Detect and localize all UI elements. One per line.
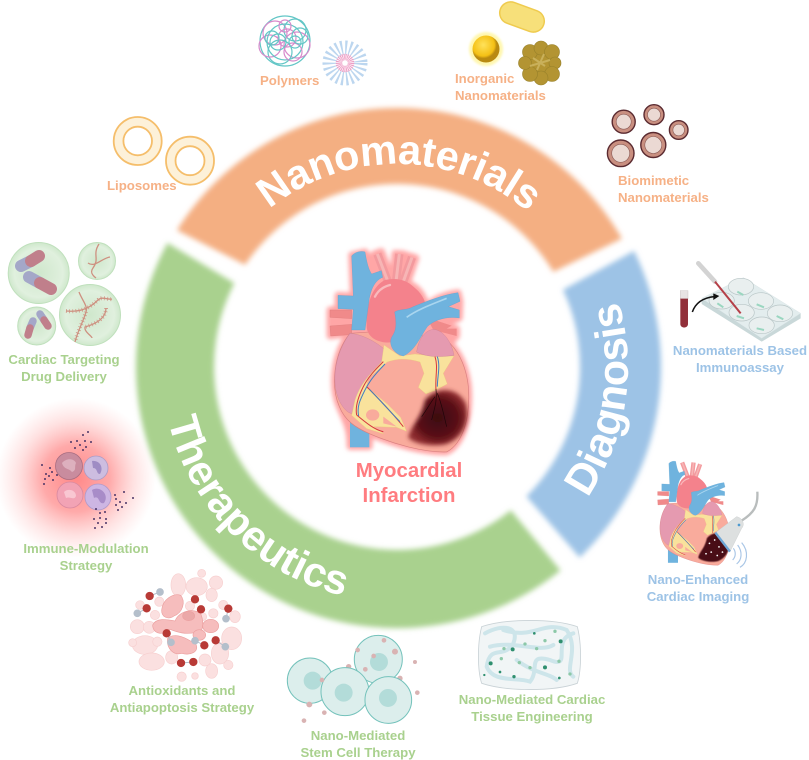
icon: inorganic nanomaterials <box>469 0 561 85</box>
icon: polymers <box>259 16 310 66</box>
label: Nano-Mediated Cardiac Tissue Engineering: Tissue Engineering <box>471 709 593 724</box>
segment: Nanomaterials: Nanomaterials <box>255 139 538 208</box>
label: Inorganic Nanomaterials: Nanomaterials <box>455 88 546 103</box>
label: Antioxidants and Antiapoptosis Strategy: Antiapoptosis Strategy <box>110 700 255 715</box>
label: Nano-Mediated Cardiac Tissue Engineering: Nano-Mediated Cardiac <box>459 692 605 707</box>
icon: immunoassay plate, blood tube and pipette <box>680 263 801 342</box>
label: Biomimetic Nanomaterials <box>618 173 709 205</box>
label: Inorganic Nanomaterials: Inorganic <box>455 71 514 86</box>
icon: micelle <box>330 48 360 78</box>
icon: tissue engineering scaffold <box>478 620 581 690</box>
label: Immune-Modulation Strategy: Strategy <box>60 558 113 573</box>
label: Nano-Enhanced Cardiac Imaging: Nano-Enhanced <box>648 572 748 587</box>
icon: liposomes <box>114 117 214 185</box>
segment: Nanomaterials <box>174 104 624 274</box>
gold sphere <box>469 32 503 66</box>
label: Immune-Modulation Strategy <box>23 541 149 573</box>
heart glow <box>330 251 469 452</box>
gold nanoflower <box>518 41 561 85</box>
capsule <box>497 0 547 35</box>
segment: Diagnosis <box>524 248 664 560</box>
label: Nano-Mediated Cardiac Tissue Engineering <box>459 692 605 724</box>
label: Nanomaterials Based Immunoassay <box>673 343 807 375</box>
label: Antioxidants and Antiapoptosis Strategy <box>110 683 255 715</box>
pipette <box>698 263 715 282</box>
blood tube <box>680 291 688 299</box>
small heart <box>658 461 730 565</box>
label: Biomimetic Nanomaterials: Biomimetic <box>618 173 689 188</box>
label: Nanomaterials Based Immunoassay: Immunoassay <box>696 360 785 375</box>
title: Myocardial Infarction: Infarction <box>363 485 455 507</box>
title: Myocardial Infarction: Myocardial <box>356 460 462 482</box>
icon: antioxidants cluster <box>129 569 242 681</box>
label: Nano-Mediated Stem Cell Therapy: Stem Cell Therapy <box>300 745 416 760</box>
label: Polymers: Polymers <box>260 73 319 88</box>
ultrasound probe <box>715 492 757 567</box>
label: Nano-Mediated Stem Cell Therapy: Nano-Mediated <box>311 728 405 743</box>
icon: stem cells <box>287 635 420 723</box>
drug capsules <box>21 256 51 335</box>
label: Cardiac Targeting Drug Delivery: Cardiac Targeting <box>8 352 120 367</box>
icon: nano-enhanced cardiac imaging <box>658 461 757 567</box>
segment: Therapeutics <box>132 240 562 632</box>
segment: Therapeutics: Therapeutics <box>170 412 346 594</box>
label: Nano-Enhanced Cardiac Imaging <box>647 572 749 604</box>
segment: Diagnosis: Diagnosis <box>564 304 630 496</box>
label: Cardiac Targeting Drug Delivery: Drug Delivery <box>21 369 108 384</box>
icon: biomimetic nanomaterials <box>607 105 688 167</box>
icon: immune modulation cells <box>41 431 134 529</box>
label: Nano-Mediated Stem Cell Therapy <box>300 728 416 760</box>
infarct area <box>408 390 467 445</box>
label: Antioxidants and Antiapoptosis Strategy: Antioxidants and <box>129 683 235 698</box>
label: Biomimetic Nanomaterials: Nanomaterials <box>618 190 709 205</box>
label: Nanomaterials Based Immunoassay: Nanomaterials Based <box>673 343 807 358</box>
title: Myocardial Infarction <box>356 460 462 507</box>
label: Nano-Enhanced Cardiac Imaging: Cardiac Imaging <box>647 589 749 604</box>
label: Liposomes: Liposomes <box>107 178 177 193</box>
label: Inorganic Nanomaterials <box>455 71 546 103</box>
label: Cardiac Targeting Drug Delivery <box>8 352 120 384</box>
arrow <box>692 297 714 312</box>
label: Immune-Modulation Strategy: Immune-Modulation <box>23 541 149 556</box>
ring: three-segment circle <box>96 104 702 652</box>
icon: cardiac targeting drug delivery <box>8 242 121 346</box>
well plate <box>702 300 801 342</box>
fibers <box>66 244 112 342</box>
red glow behind immune cells <box>0 398 156 558</box>
icon: central heart with infarct <box>330 251 469 452</box>
